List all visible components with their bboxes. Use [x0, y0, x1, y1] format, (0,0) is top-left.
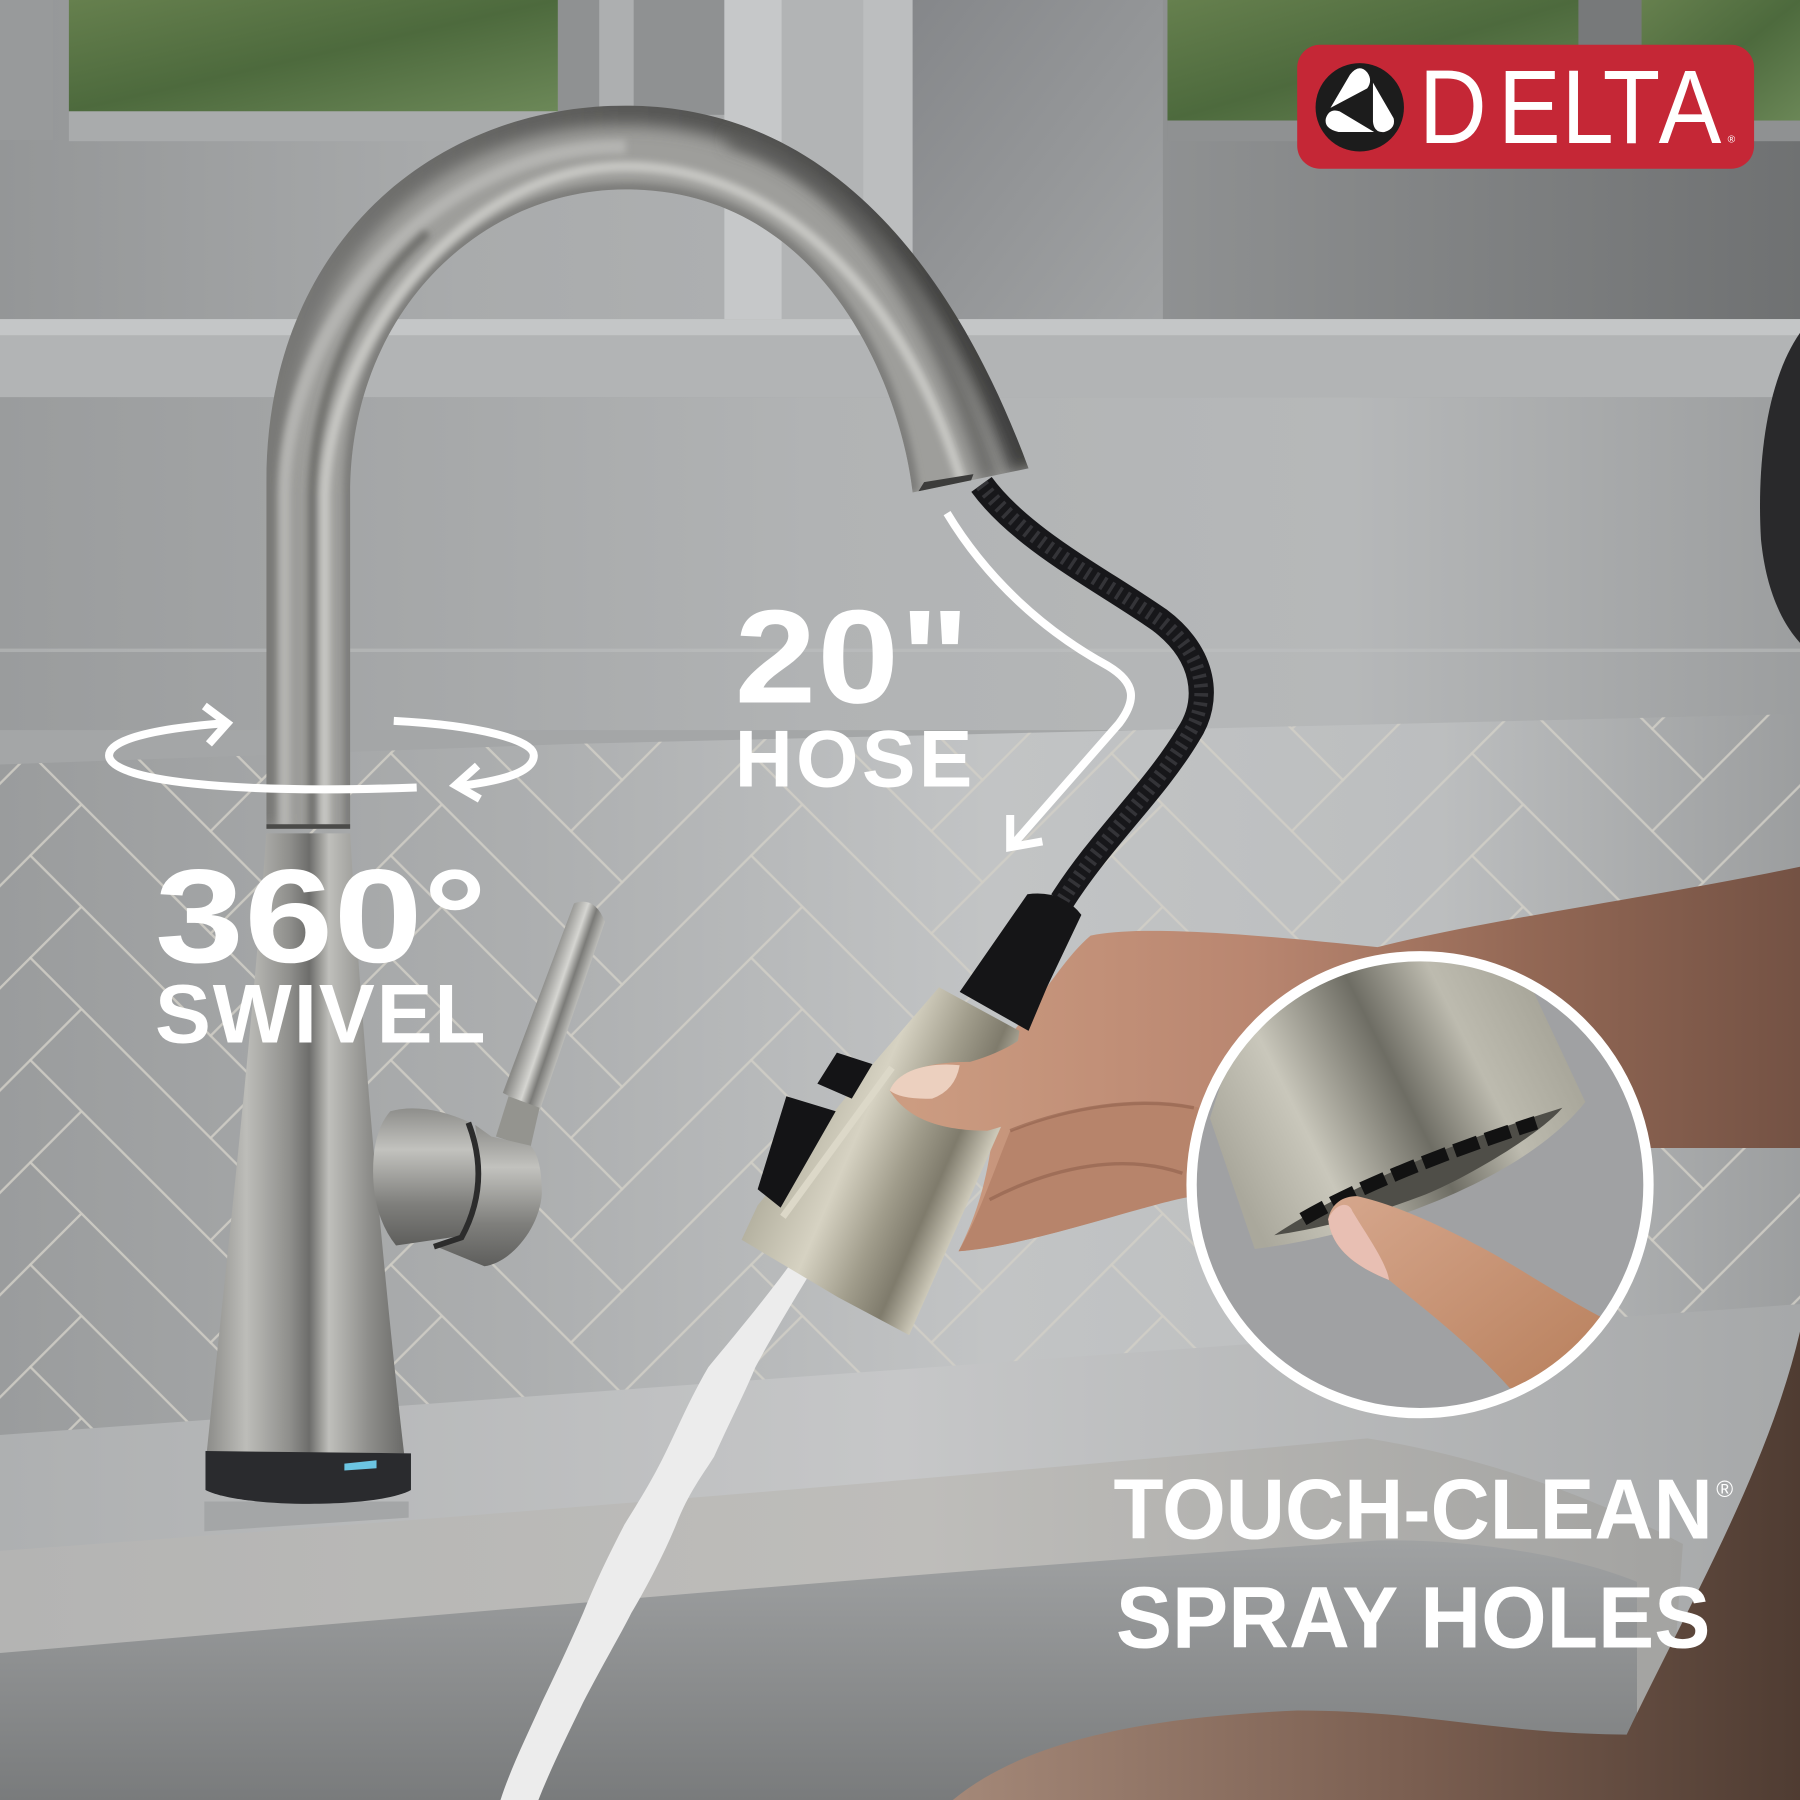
hand holding sprayer	[890, 867, 1800, 1251]
inset circle: touch-clean spray holes	[1192, 953, 1648, 1413]
water stream	[501, 1265, 808, 1800]
touch LED	[344, 1460, 377, 1471]
faucet base body	[207, 833, 404, 1453]
thumbnail	[890, 1065, 960, 1099]
swivel label: SWIVEL	[155, 966, 486, 1060]
sprayer body	[742, 987, 1019, 1335]
thumb over sprayer	[890, 1010, 1091, 1131]
sprayer head	[742, 894, 1091, 1335]
arm and lower hand	[953, 1332, 1800, 1800]
faucet	[205, 106, 1029, 1504]
sprayer buttons	[758, 1053, 872, 1208]
faucet black base	[205, 1451, 411, 1504]
spray holes label: SPRAY HOLES	[1116, 1569, 1710, 1666]
swivel arrows	[109, 706, 534, 799]
tile backsplash	[0, 714, 1800, 1441]
counter and sink	[0, 1304, 1800, 1800]
hose label: HOSE	[735, 714, 972, 804]
360 degree label: 360°	[155, 842, 487, 991]
faucet neck and gooseneck spout	[264, 106, 1029, 832]
logo triangle mark	[1326, 68, 1394, 132]
sprayer slot highlight	[783, 1068, 892, 1217]
touch-clean label: TOUCH-CLEAN	[1114, 1461, 1713, 1556]
logo registered mark: ®	[1728, 134, 1736, 145]
black speaker object at right edge	[1760, 333, 1800, 643]
Delta logo	[1297, 45, 1754, 169]
logo wordmark: DELTA	[1419, 49, 1722, 166]
inset nozzle and finger	[1210, 953, 1607, 1412]
hose	[982, 484, 1201, 901]
20 inch label: 20"	[735, 582, 970, 731]
hose length arrow	[947, 513, 1131, 847]
hose connector	[960, 894, 1081, 1031]
spout opening	[918, 474, 973, 491]
registered mark: ®	[1716, 1476, 1733, 1502]
handle lever	[373, 902, 605, 1266]
